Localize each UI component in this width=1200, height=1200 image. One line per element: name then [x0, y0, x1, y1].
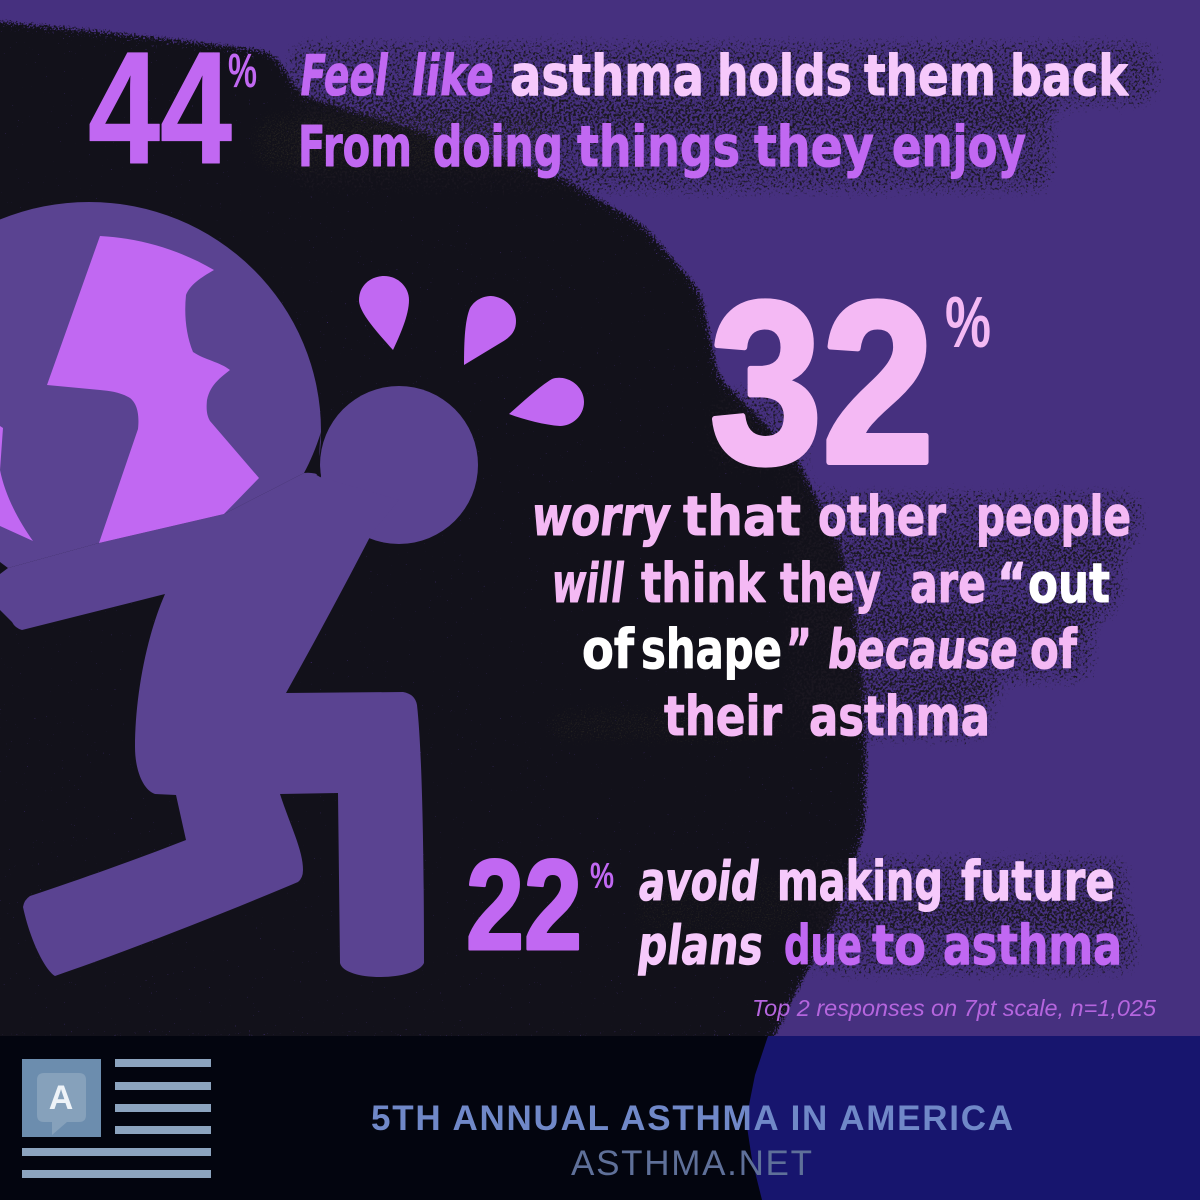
logo: flag with speech bubble	[22, 1059, 211, 1178]
text: from doing things they enjoy: doing	[433, 115, 563, 180]
footer title: 5TH ANNUAL ASTHMA IN AMERICA	[371, 1099, 1013, 1138]
logo: flag stripes	[22, 1059, 211, 1178]
text: will think they are "out: “	[997, 552, 1027, 615]
figure: globe land mass	[47, 236, 259, 543]
stat: 44 percent: 44	[88, 18, 232, 197]
text: feel like asthma holds them back: holds	[717, 44, 852, 109]
figure: body and legs	[0, 473, 424, 977]
text: feel like asthma holds them back: like	[408, 44, 498, 109]
text: avoid making future: making	[777, 850, 943, 913]
text: their asthma: their	[664, 685, 782, 748]
text: feel like asthma holds them back: back	[1010, 44, 1129, 109]
text: avoid making future	[635, 850, 1115, 913]
text: worry that other people: people	[976, 485, 1131, 548]
background: dark sprayed shape	[0, 22, 862, 1040]
background: faint grain on dark area	[240, 100, 820, 950]
text: avoid making future: future	[961, 850, 1115, 913]
icon: sweat drop 1	[359, 276, 409, 350]
text: will think they are "out: they	[780, 552, 881, 615]
text: plans due to asthma: asthma	[943, 914, 1122, 977]
text: of shape" because of	[582, 618, 1077, 681]
text: of shape" because of: of	[582, 618, 634, 681]
footnote: Top 2 responses on 7pt scale, n=1,025	[752, 995, 1156, 1021]
text: feel like asthma holds them back: Feel	[296, 44, 392, 109]
text: worry that other people: that	[683, 485, 801, 548]
text: plans due to asthma: due	[784, 914, 862, 977]
text: worry that other people: other	[818, 485, 946, 548]
text: plans due to asthma: to	[872, 914, 926, 977]
text: from doing things they enjoy: From	[298, 115, 412, 180]
figure: globe	[0, 202, 321, 568]
stat: 32 percent: %	[945, 283, 991, 363]
logo: speech bubble	[37, 1073, 86, 1135]
footer url: ASTHMA.NET	[571, 1144, 812, 1183]
text: of shape" because of: of	[1030, 618, 1077, 681]
text: plans due to asthma: plans	[634, 914, 767, 977]
text: will think they are "out: will	[548, 552, 628, 615]
text: of shape" because of: shape	[641, 618, 782, 681]
stat: 22 percent: 22	[466, 834, 582, 977]
stat: 32 percent: 32	[710, 254, 934, 511]
icon: sweat drop 2	[464, 296, 516, 365]
figure carrying a globe	[0, 202, 584, 977]
text: will think they are "out: are	[910, 552, 986, 615]
background: spray halos behind text	[275, 30, 1170, 986]
text: worry that other people: worry	[528, 485, 674, 548]
icon: sweat drop 3	[509, 378, 584, 426]
text: will think they are "out	[548, 552, 1110, 615]
logo: letter A: A	[49, 1079, 73, 1117]
text: from doing things they enjoy: things	[577, 115, 740, 180]
text: from doing things they enjoy	[298, 115, 1026, 180]
text: from doing things they enjoy: they	[754, 115, 874, 180]
text: feel like asthma holds them back: them	[864, 44, 996, 109]
figure: globe land mass left	[0, 426, 33, 541]
stat: 22 percent: %	[590, 855, 614, 896]
text: will think they are "out: out	[1028, 552, 1110, 615]
figure: head	[320, 386, 478, 544]
logo: flag canton	[22, 1059, 101, 1137]
text: will think they are "out: think	[641, 552, 766, 615]
text: of shape" because of: ”	[786, 618, 812, 681]
text: their asthma	[664, 685, 990, 748]
stat: 44 percent: %	[228, 45, 257, 98]
text: from doing things they enjoy: enjoy	[892, 115, 1026, 180]
text: plans due to asthma	[634, 914, 1122, 977]
text: feel like asthma holds them back	[296, 44, 1129, 109]
figure: gap between globe and head	[304, 432, 321, 476]
text: avoid making future: avoid	[635, 850, 763, 913]
footer band	[0, 1036, 1200, 1200]
text: feel like asthma holds them back: asthma	[510, 44, 704, 109]
text: worry that other people	[528, 485, 1131, 548]
text: their asthma: asthma	[809, 685, 990, 748]
text: of shape" because of: because	[824, 618, 1022, 681]
